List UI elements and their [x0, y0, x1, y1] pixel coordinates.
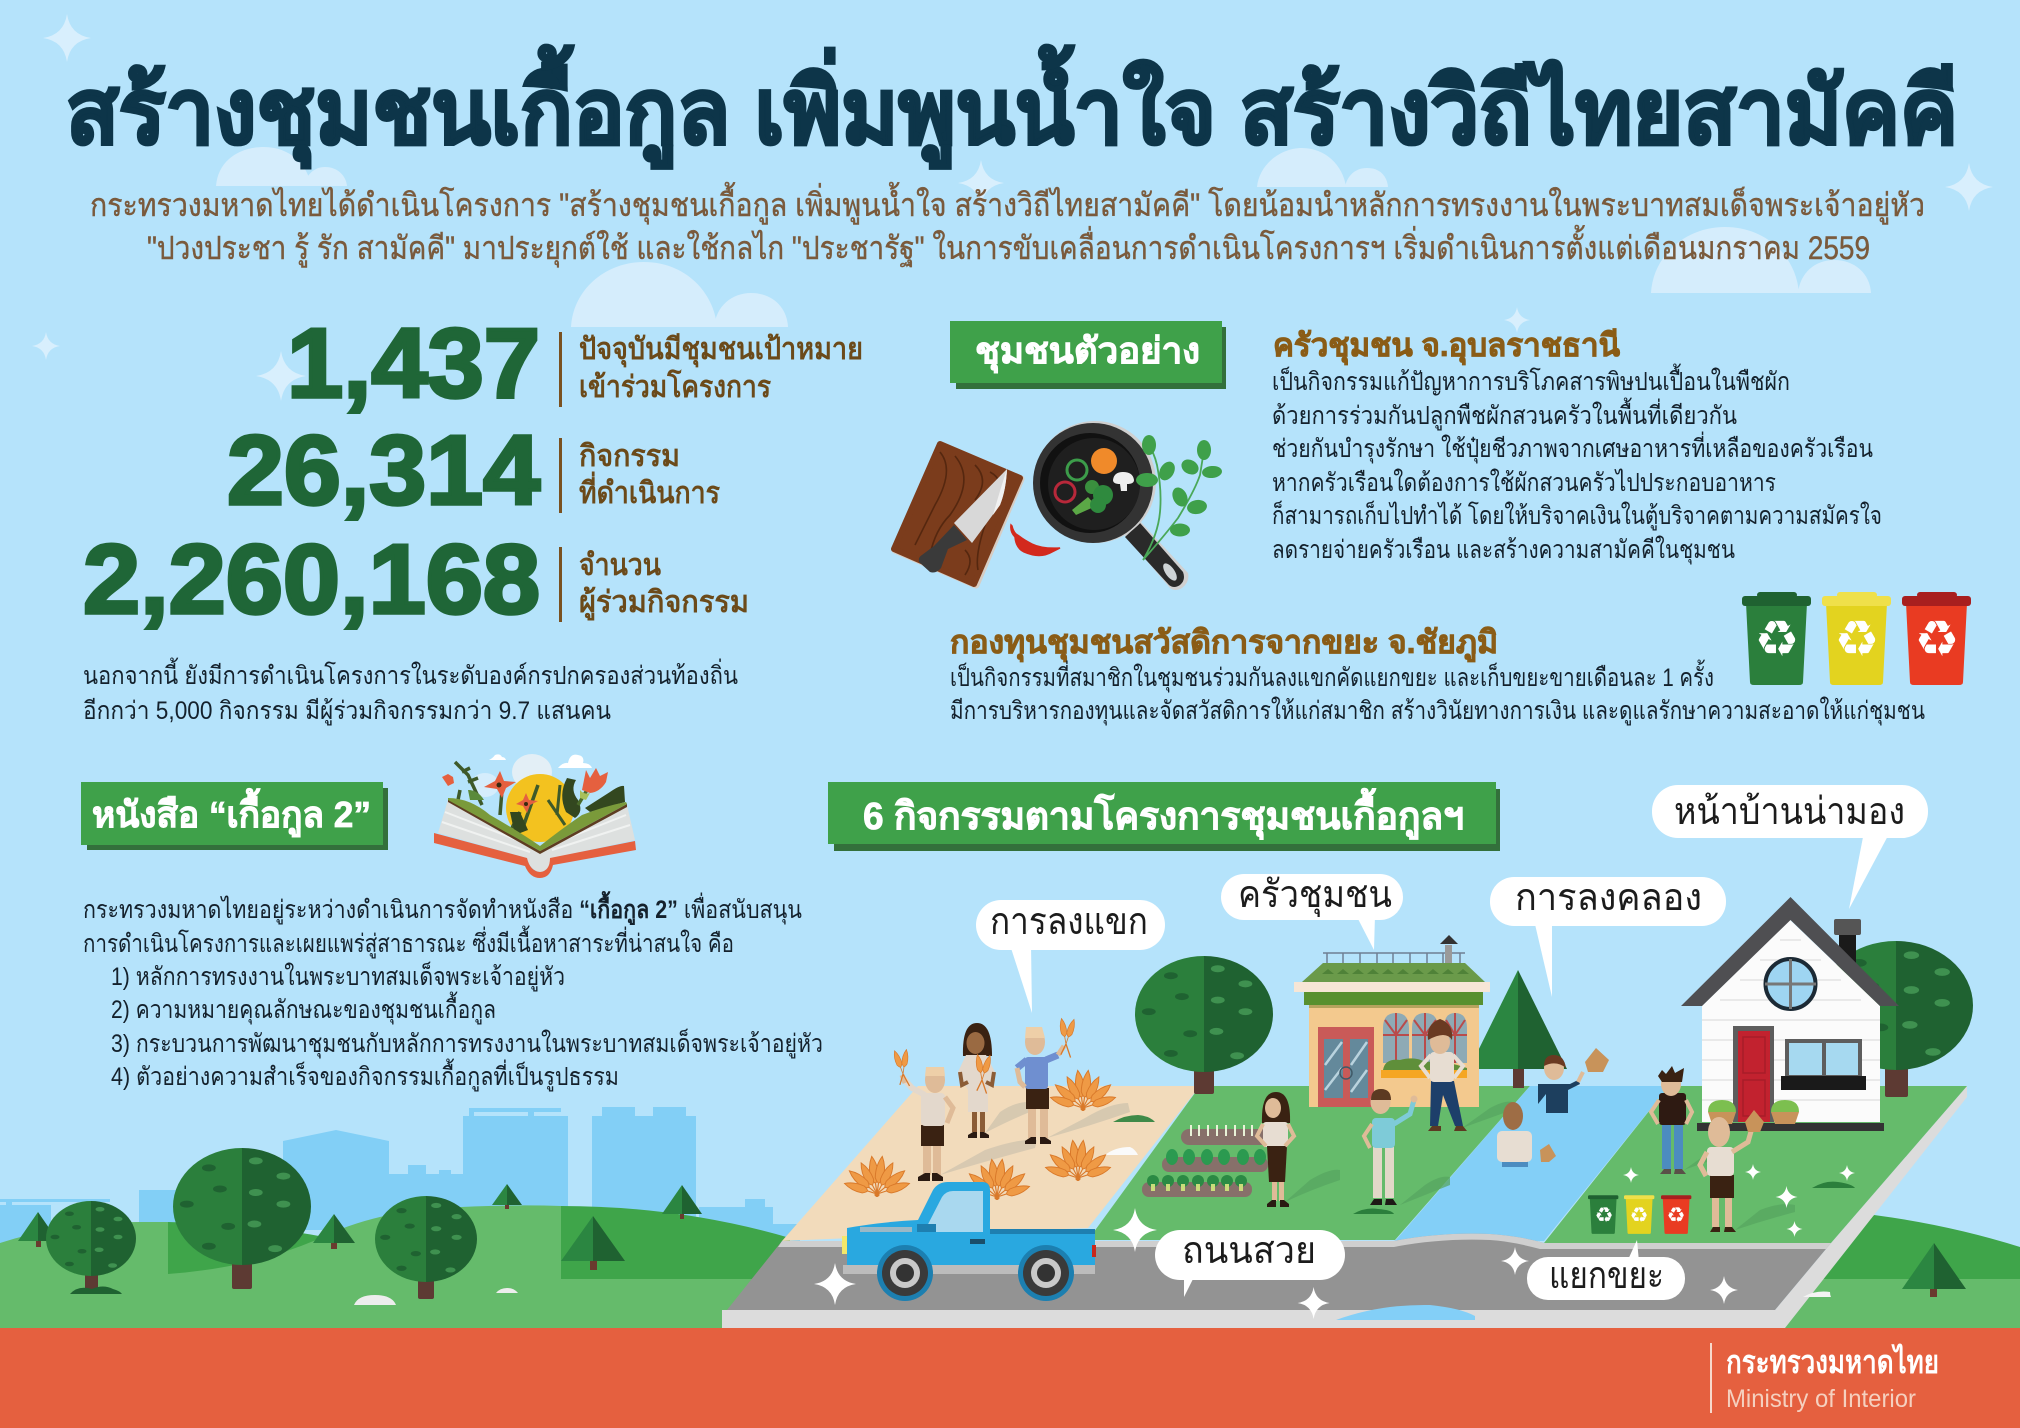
banner: model communities: ชุมชนตัวอย่าง [975, 330, 1200, 374]
stat: activities [227, 415, 720, 525]
farmer 3 [1017, 1018, 1077, 1144]
woman at garden [1257, 1092, 1294, 1207]
banner: model communities [950, 321, 1226, 389]
side edge of platform [722, 1086, 1967, 1328]
stat: activities: 26,314 [227, 415, 540, 525]
pickup truck [842, 1182, 1096, 1301]
small recycling bins: ♻ [1630, 1203, 1648, 1227]
house lawn [1544, 1086, 1967, 1243]
callout: road [1155, 1230, 1345, 1297]
book description: 4) ตัวอย่างความสำเร็จของกิจกรรมเกื้อกูลที่เป็นรูปธรรม [111, 1058, 619, 1092]
story: community kitchen: ครัวชุมชน จ.อุบลราชธานี [1273, 327, 1620, 366]
story: community kitchen: หากครัวเรือนใดต้องการใช้ผักสวนครัวไปประกอบอาหาร [1272, 468, 1776, 497]
icon: recycling bins [1742, 592, 1971, 685]
story: community kitchen: เป็นกิจกรรมแก้ปัญหาการบริโภคสารพิษปนเปื้อนในพืชผัก [1272, 363, 1790, 396]
callout: community kitchen: ครัวชุมชน [1238, 874, 1392, 917]
clouds and sun [471, 754, 592, 842]
decorative sky sparkles [32, 14, 1993, 401]
banner: book: หนังสือ “เกื้อกูล 2” [92, 788, 371, 838]
callout: harvest: การลงแขก [990, 901, 1148, 943]
icon: recycling bins: ♻ [1755, 610, 1799, 668]
main platform [722, 1086, 1967, 1328]
white house tree [1819, 941, 1973, 1097]
ministry name: กระทรวงมหาดไทย [1726, 1343, 1939, 1380]
book description: การดำเนินโครงการและเผยแพร่สู่สาธารณะ ซึ่งมีเนื้อหาสาระที่น่าสนใจ คือ [83, 925, 734, 959]
story: community kitchen [1272, 327, 1882, 565]
title: สร้างชุมชนเกื้อกูล เพิ่มพูนน้ำใจ สร้างวิถีไทยสามัคคี [66, 45, 1958, 169]
stat: activities: กิจกรรม [579, 440, 680, 473]
stat: activities: ที่ดำเนินการ [579, 471, 720, 510]
book description: 3) กระบวนการพัฒนาชุมชนกับหลักการทรงงานในพระบาทสมเด็จพระเจ้าอยู่หัว [111, 1028, 823, 1059]
farmer 1 [892, 1049, 953, 1181]
local government note [83, 657, 738, 726]
people: garden and kitchen [1257, 1019, 1764, 1232]
callout: road: ถนนสวย [1182, 1230, 1316, 1272]
garden lawn [1088, 1086, 1530, 1240]
cast shadows [940, 1102, 1795, 1230]
cover [434, 833, 636, 878]
banner: six activities [828, 782, 1500, 851]
centre tree [1135, 956, 1273, 1094]
man in canal back [1497, 1102, 1556, 1167]
plants [442, 762, 625, 835]
story: community kitchen: ลดรายจ่ายครัวเรือน และสร้างความสามัคคีในชุมชน [1272, 535, 1735, 565]
story: waste fund [950, 624, 1925, 726]
subtitle [90, 182, 1925, 268]
callout: sorting waste: แยกขยะ [1549, 1255, 1664, 1297]
hills [0, 1205, 2020, 1328]
small recycling bins: ♻ [1595, 1203, 1613, 1227]
stat: participants: ผู้ร่วมกิจกรรม [579, 586, 749, 621]
story: community kitchen: ช่วยกันบำรุงรักษา ใช้ปุ๋ยชีวภาพจากเศษอาหารที่เหลือของครัวเรือน [1272, 431, 1873, 464]
ministry name english: Ministry of Interior [1726, 1385, 1916, 1413]
man with basket [1700, 1110, 1764, 1232]
banner: six activities: 6 กิจกรรมตามโครงการชุมชนเกื้อกูลฯ [863, 788, 1464, 840]
clouds [216, 147, 1871, 327]
stat: participants: 2,260,168 [83, 524, 540, 634]
callout: canal [1490, 877, 1726, 997]
callout: house front: หน้าบ้านน่ามอง [1674, 791, 1905, 833]
white house [1681, 897, 1899, 1131]
community kitchen building [1294, 935, 1490, 1107]
ground sparkles [814, 1164, 1855, 1319]
footer band [0, 1328, 2020, 1428]
story: community kitchen: ก็สามารถเก็บไปทำได้ โดยให้บริจาคเงินในตู้บริจาคตามความสมัครใจ [1272, 500, 1882, 531]
canal-side pine [1469, 970, 1567, 1088]
icon: kitchen [894, 421, 1222, 590]
wheat bushes [843, 1070, 1117, 1202]
left trees [46, 1148, 518, 1305]
farmer 2 [958, 1023, 995, 1138]
man at kitchen door [1421, 1019, 1467, 1131]
stat: participants [83, 524, 749, 634]
stat: communities [287, 308, 863, 418]
city skyline [0, 1107, 800, 1250]
herb sprigs [1136, 435, 1222, 560]
icon: recycling bins: ♻ [1915, 610, 1959, 668]
chili [1011, 525, 1060, 556]
small recycling bins: ♻ [1667, 1203, 1685, 1227]
stat: communities: 1,437 [287, 308, 540, 418]
pages [438, 800, 635, 872]
callout: sorting waste [1527, 1240, 1685, 1300]
callout: house front [1652, 785, 1928, 909]
man teal shirt [1364, 1089, 1418, 1205]
road [727, 1234, 1831, 1310]
cutting board [894, 444, 1021, 585]
book description: 2) ความหมายคุณลักษณะของชุมชนเกื้อกูล [111, 991, 496, 1025]
banner: book [81, 782, 388, 850]
wheat field [782, 1086, 1200, 1241]
small recycling bins [1588, 1195, 1691, 1234]
garden beds [1142, 1125, 1270, 1197]
stat: communities: ปัจจุบันมีชุมชนเป้าหมาย [579, 333, 863, 368]
knife [919, 469, 1007, 572]
frying pan [1033, 421, 1188, 590]
story: community kitchen: ด้วยการร่วมกันปลูกพืชผักสวนครัวในพื้นที่เดียวกัน [1272, 397, 1737, 431]
field bumps [1105, 1115, 1855, 1297]
story: waste fund: กองทุนชุมชนสวัสดิการจากขยะ จ.ชัยภูมิ [950, 624, 1498, 663]
man dark tee [1651, 1066, 1692, 1174]
stat: communities: เข้าร่วมโครงการ [579, 368, 771, 404]
callout: canal: การลงคลอง [1515, 877, 1702, 919]
stat: participants: จำนวน [579, 549, 661, 582]
man in canal navy [1538, 1048, 1609, 1113]
book description [83, 890, 823, 1092]
canal water [1395, 1086, 1669, 1241]
icon: open book with flowers [434, 754, 636, 878]
callout: community kitchen [1221, 874, 1403, 950]
book description: กระทรวงมหาดไทยอยู่ระหว่างดำเนินการจัดทำหนังสือ “เกื้อกูล 2” เพื่อสนับสนุน [83, 890, 802, 926]
small pines left [18, 1184, 1966, 1297]
icon: recycling bins: ♻ [1835, 610, 1879, 668]
local government note: นอกจากนี้ ยังมีการดำเนินโครงการในระดับองค์กรปกครองส่วนท้องถิ่น [83, 657, 738, 690]
soil layers [448, 799, 627, 854]
story: waste fund: เป็นกิจกรรมที่สมาชิกในชุมชนร่วมกันลงแขกคัดแยกขยะ และเก็บขยะขายเดือนละ 1 ครั้ง [950, 659, 1714, 693]
book description: 1) หลักการทรงงานในพระบาทสมเด็จพระเจ้าอยู่หัว [111, 961, 565, 992]
callout: harvest [976, 900, 1165, 1013]
people: wheat farmers [892, 1018, 1077, 1181]
local government note: อีกกว่า 5,000 กิจกรรม มีผู้ร่วมกิจกรรมกว่า 9.7 แสนคน [83, 697, 611, 726]
